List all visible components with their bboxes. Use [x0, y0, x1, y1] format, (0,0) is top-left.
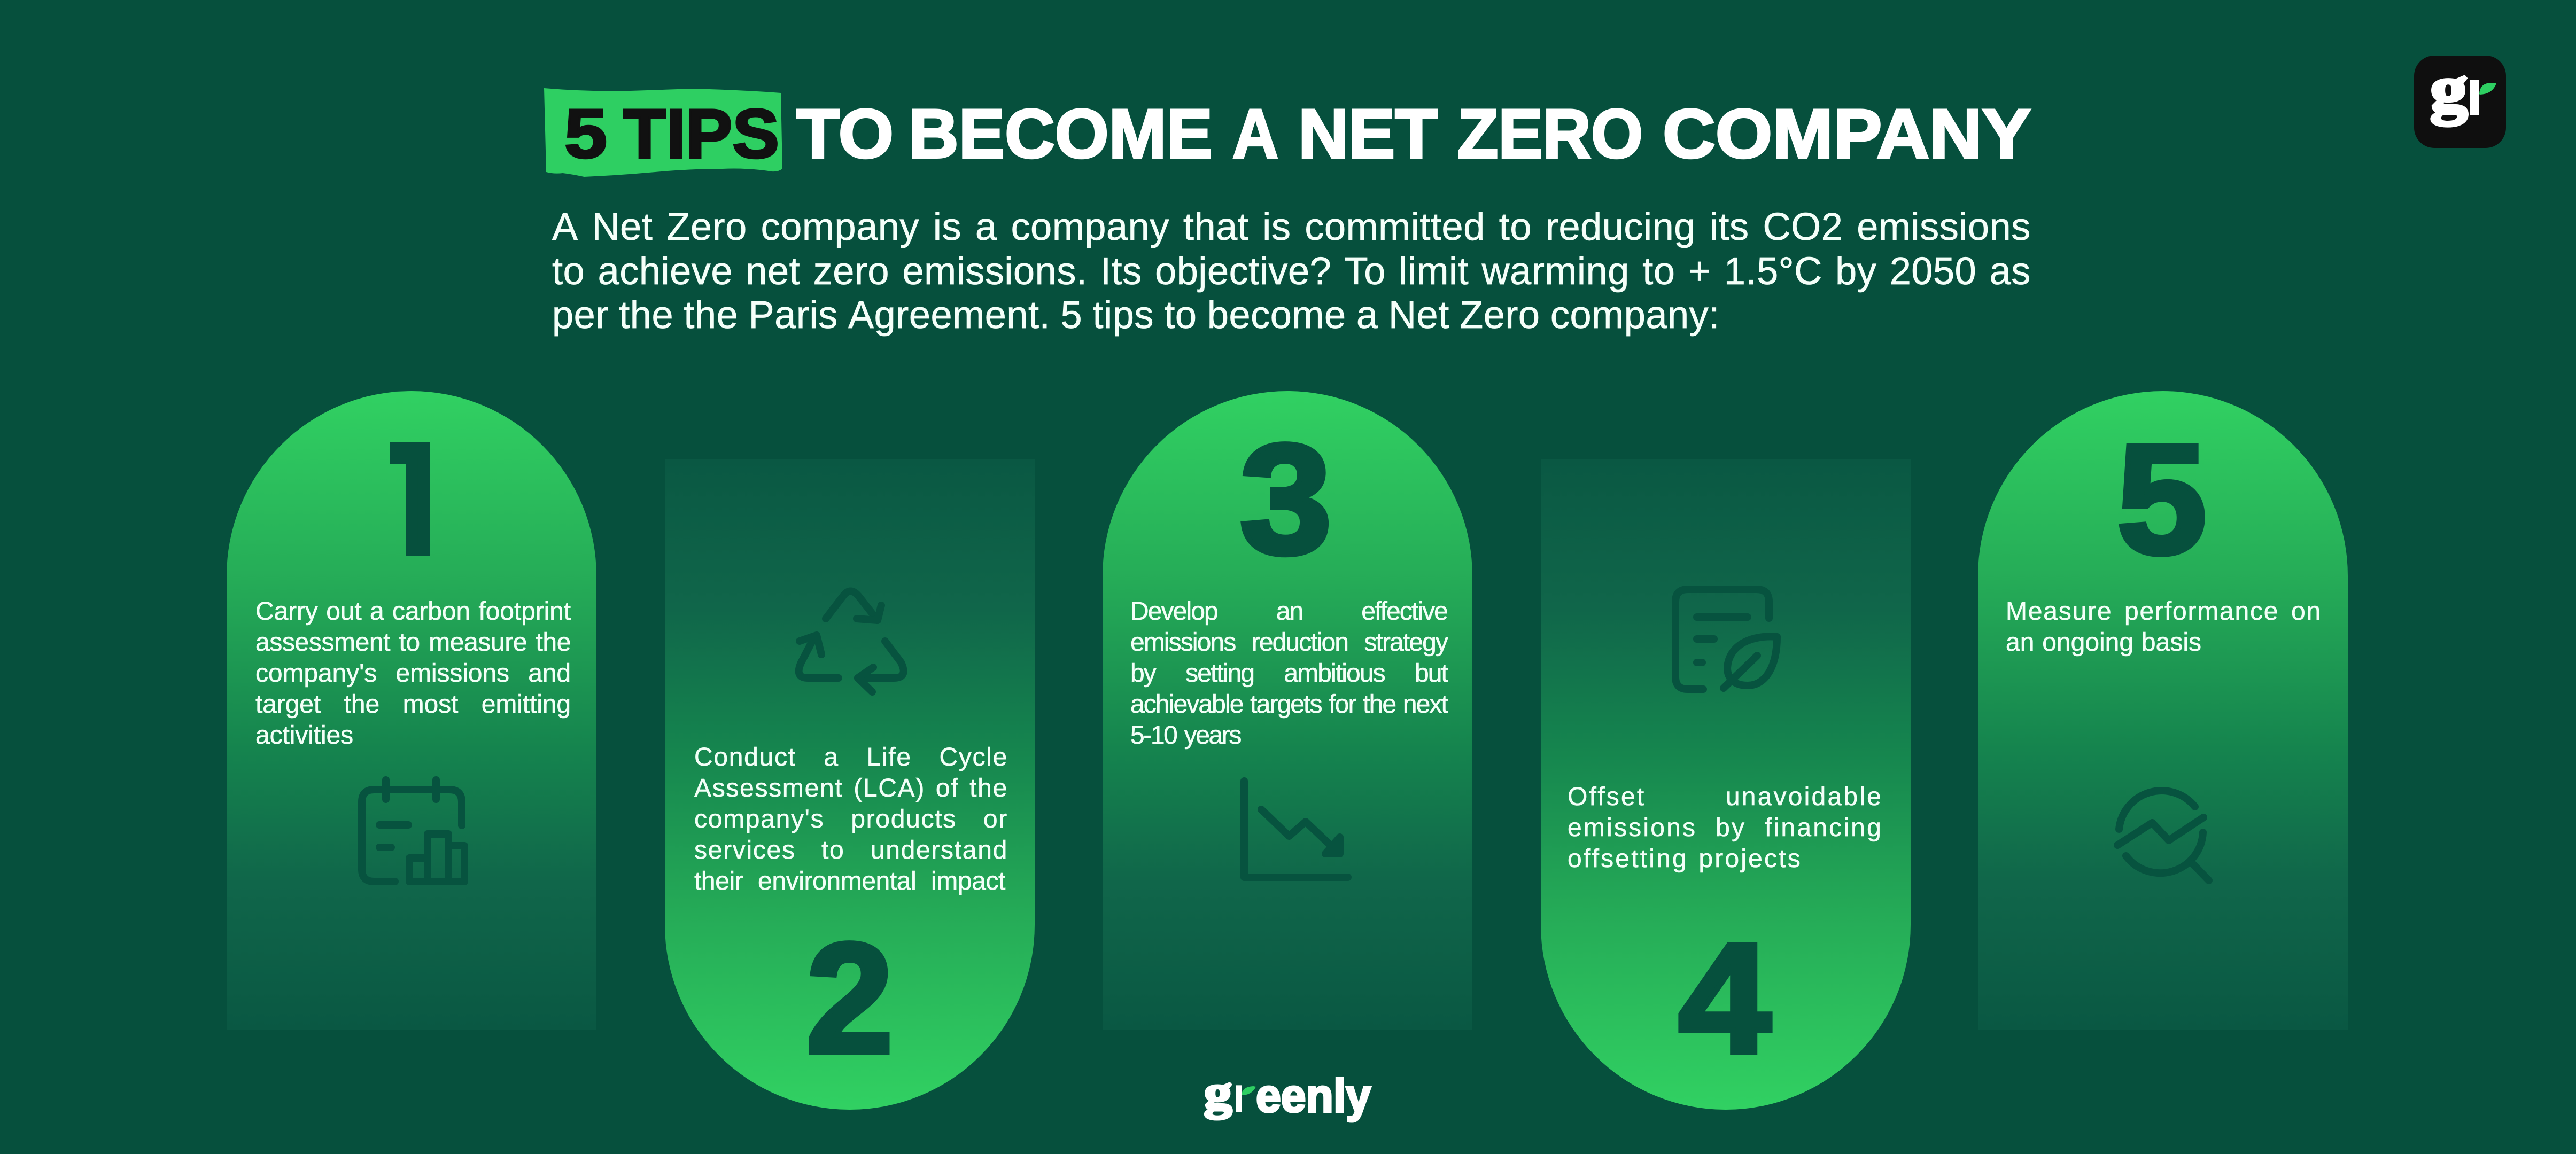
tip 1 text [255, 597, 571, 750]
intro paragraph: objective? [1155, 250, 1331, 293]
panel: tip 3: reduction [1252, 628, 1348, 657]
panel: tip 4: emissions [1568, 814, 1697, 842]
intro paragraph: Zero [666, 206, 747, 248]
panel: tip 4: Offset [1568, 783, 1646, 811]
intro paragraph: to [552, 250, 585, 293]
panel: tip 4: financing [1765, 814, 1883, 842]
number 2: 2 [806, 911, 893, 1085]
title main words: COMPANY [1663, 95, 2031, 173]
intro paragraph: committed [1305, 206, 1485, 248]
panel: tip 1: activities [255, 721, 353, 750]
panel: tip 2: impact [931, 867, 1005, 895]
panel: tip 2: of [936, 774, 959, 802]
intro paragraph: 1.5°C [1724, 250, 1822, 293]
panel: tip 5: ongoing [2042, 628, 2133, 657]
panel: tip 1: a [370, 597, 384, 626]
intro paragraph: limit [1399, 250, 1469, 293]
intro paragraph: reducing [1546, 206, 1696, 248]
panel: tip 1: emitting [482, 690, 571, 719]
panel: tip 2: to [821, 836, 844, 864]
intro paragraph: Agreement. [848, 294, 1050, 337]
panel: tip 4: offsetting [1568, 845, 1688, 873]
panel: tip 2: or [983, 805, 1008, 833]
greenly logo bottom: r [1231, 1069, 1250, 1122]
icon: search with chart line [2117, 791, 2209, 880]
intro paragraph: a [975, 206, 997, 248]
panel: tip 3: by [1130, 659, 1155, 688]
panel: tip 2: Assessment [694, 774, 843, 802]
panel: tip 3: but [1415, 659, 1447, 688]
panel: tip 2: Conduct [694, 743, 796, 771]
title main words: ZERO [1457, 95, 1643, 173]
number 5: 5 [2117, 412, 2207, 586]
intro paragraph: Net [592, 206, 653, 248]
panel: tip 3: emissions [1130, 628, 1235, 657]
panel: tip 5 [1978, 391, 2348, 1030]
title highlighted words: 5 [564, 95, 607, 173]
header graphics: title and logos [544, 56, 2506, 1123]
icon: recycle [799, 591, 904, 692]
panel: tip 3: for [1329, 690, 1356, 719]
intro paragraph: zero [813, 250, 889, 293]
logo badge top right [2414, 52, 2506, 148]
intro paragraph: tips [1093, 294, 1154, 337]
panel: tip 2: company's [694, 805, 824, 833]
title main words [796, 95, 2031, 173]
intro paragraph: the [619, 294, 673, 337]
panel: tip 4: unavoidable [1726, 783, 1883, 811]
intro paragraph: 5 [1061, 294, 1082, 337]
intro paragraph: Paris [749, 294, 838, 337]
title main words: A [1232, 95, 1278, 173]
panel: tip 1: Carry [255, 597, 318, 626]
panel: tip 2: the [969, 774, 1008, 802]
intro paragraph [552, 206, 2031, 337]
panel: tip 1: out [326, 597, 362, 626]
title main words: BECOME [909, 95, 1213, 173]
logo badge top right: g [2430, 52, 2468, 126]
panel: tip 1: and [528, 659, 571, 688]
intro paragraph: A [552, 206, 578, 248]
number 3: 3 [1240, 412, 1332, 586]
panel: tip 3: strategy [1364, 628, 1447, 657]
panel: tip 3: the [1363, 690, 1395, 719]
panel: tip 4: by [1716, 814, 1746, 842]
title highlight brush [544, 88, 782, 177]
icon: document with leaf [1675, 589, 1777, 689]
panel: tip 2: Life [867, 743, 912, 771]
panel: tip 3: next [1403, 690, 1447, 719]
number 4: 4 [1679, 911, 1772, 1085]
intro paragraph: as [1990, 250, 2031, 293]
intro paragraph: company [761, 206, 919, 248]
panel: tip 1: carbon [392, 597, 470, 626]
intro paragraph: its [1710, 206, 1749, 248]
intro paragraph: per [552, 294, 609, 337]
intro paragraph: is [933, 206, 961, 248]
panel: tip 3: Develop [1130, 597, 1217, 626]
intro paragraph: the [684, 294, 738, 337]
panel: tip 4: projects [1698, 845, 1802, 873]
panel: tip 1: to [399, 628, 420, 657]
panel: tip 3: targets [1250, 690, 1322, 719]
title highlighted words: TIPS [623, 95, 779, 173]
intro paragraph: become [1207, 294, 1346, 337]
panel: tip 5: an [2006, 628, 2034, 657]
intro paragraph: to [1642, 250, 1675, 293]
panel: tip 2: understand [871, 836, 1008, 864]
panel: tip 3: 5-10 [1130, 721, 1176, 750]
title main words: TO [796, 95, 894, 173]
intro paragraph: company [1011, 206, 1169, 248]
panel: tip 2: their [694, 867, 743, 895]
number 1: 1 [370, 413, 458, 590]
tip 5 text [2006, 597, 2322, 657]
title main words: NET [1298, 95, 1438, 173]
tip 3 text [1130, 597, 1448, 750]
panel: tip 3: achievable [1130, 690, 1243, 719]
tip 4 text [1568, 783, 1883, 873]
panel: tip 1: target [255, 690, 321, 719]
intro paragraph: Zero [1460, 294, 1540, 337]
intro paragraph: CO2 [1763, 206, 1843, 248]
intro paragraph: Its [1100, 250, 1142, 293]
tip 2 text [694, 743, 1008, 895]
panel: tip 5: on [2291, 597, 2322, 626]
intro paragraph: company: [1550, 294, 1720, 337]
panel: tip 2 [665, 459, 1035, 1110]
panel: tip 2: a [824, 743, 839, 771]
intro paragraph: emissions. [902, 250, 1088, 293]
intro paragraph: warming [1482, 250, 1630, 293]
panel: tip 4 [1541, 459, 1911, 1110]
intro paragraph: + [1688, 250, 1711, 293]
intro paragraph: achieve [598, 250, 733, 293]
panel: tip 1: emissions [395, 659, 509, 688]
logo badge top right: r [2465, 57, 2490, 129]
intro paragraph: Net [1388, 294, 1449, 337]
panel: tip 1: footprint [478, 597, 571, 626]
intro paragraph: To [1345, 250, 1386, 293]
intro paragraph: by [1835, 250, 1876, 293]
greenly logo bottom [1204, 1077, 1372, 1123]
intro paragraph: net [746, 250, 800, 293]
icon: calendar with bars [362, 780, 464, 882]
intro paragraph: emissions [1857, 206, 2031, 248]
panel: tip 5: performance [2124, 597, 2279, 626]
panel: tip 1: the [536, 628, 571, 657]
panel: tip 1: measure [429, 628, 527, 657]
greenly logo bottom: g [1204, 1065, 1232, 1119]
panel: tip 1: assessment [255, 628, 390, 657]
panel: tip 3: effective [1361, 597, 1447, 626]
panel: tip 1: most [403, 690, 458, 719]
panel: tip 2: Cycle [939, 743, 1008, 771]
panel: tip 3: ambitious [1284, 659, 1385, 688]
intro paragraph: is [1262, 206, 1291, 248]
panel: tip 3: years [1184, 721, 1240, 750]
number 1 [390, 442, 430, 556]
icon: declining chart [1244, 781, 1348, 877]
panel: tip 3: an [1276, 597, 1302, 626]
intro paragraph: to [1164, 294, 1197, 337]
title [544, 88, 2031, 177]
intro paragraph: a [1356, 294, 1378, 337]
panel: tip 2: services [694, 836, 796, 864]
panel: tip 3: setting [1185, 659, 1254, 688]
panel: tip 1: company's [255, 659, 377, 688]
panel: tip 5: basis [2142, 628, 2201, 657]
panel: tip 1 [227, 391, 596, 1030]
panel: tip 3 [1103, 391, 1472, 1030]
panel: tip 2: products [851, 805, 957, 833]
greenly logo bottom: eenly [1256, 1069, 1371, 1122]
intro paragraph: to [1499, 206, 1532, 248]
panel: tip 5: Measure [2006, 597, 2112, 626]
panel: tip 2: environmental [758, 867, 916, 895]
panel: tip 1: the [344, 690, 379, 719]
intro paragraph: 2050 [1890, 250, 1976, 293]
intro paragraph: that [1183, 206, 1248, 248]
panel: tip 2: (LCA) [854, 774, 925, 802]
